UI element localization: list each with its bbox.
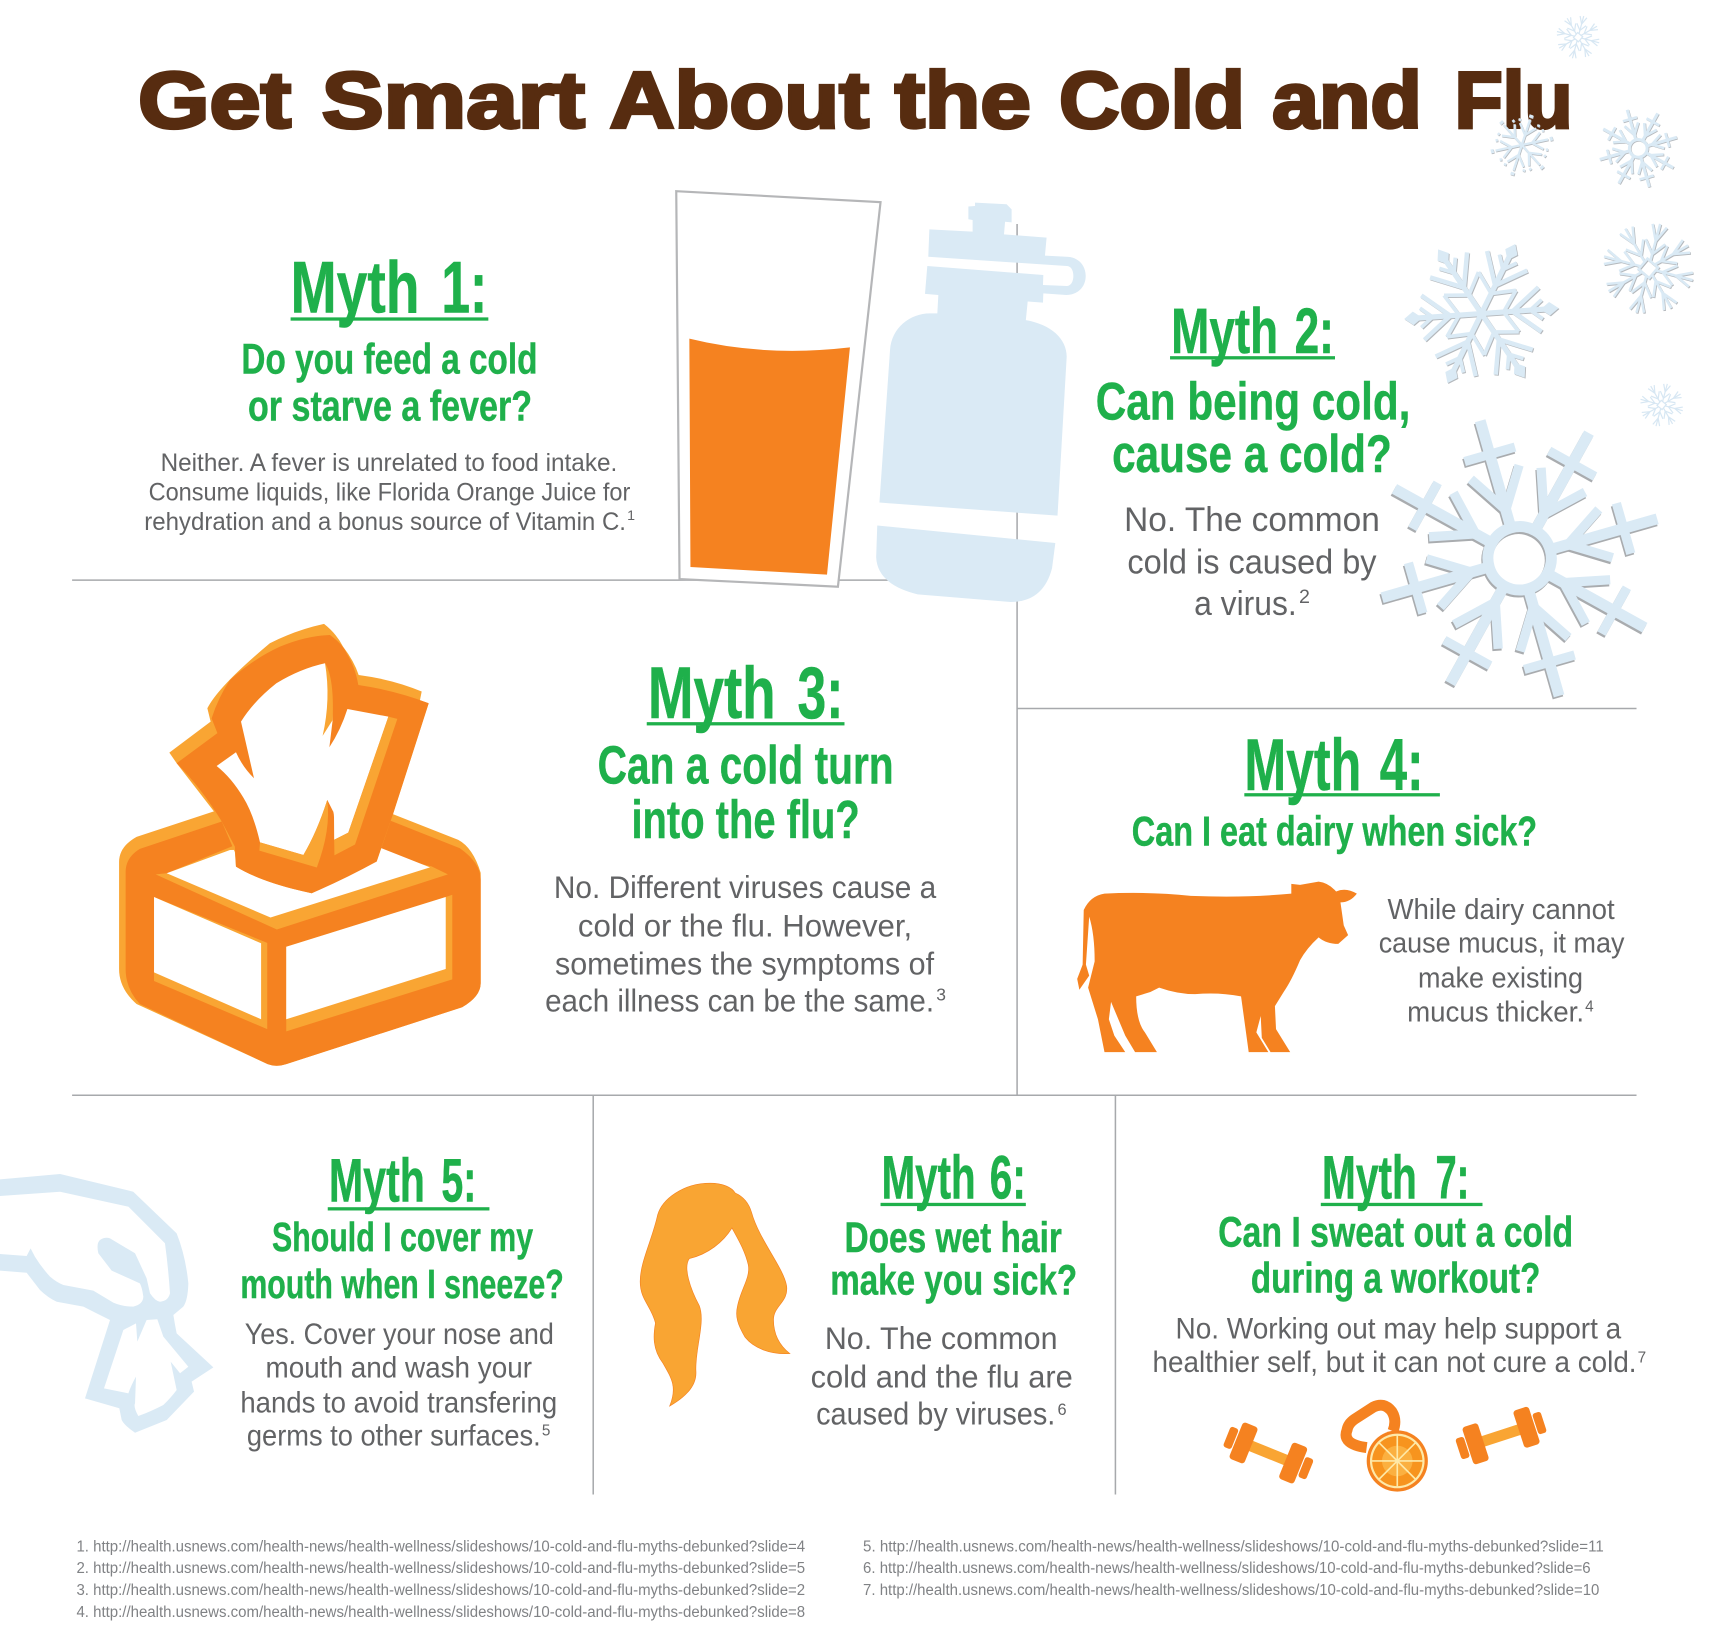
answer: myth 2: 2 — [1299, 586, 1310, 608]
answer: myth 7: healthier self, but it can not cure a cold. — [1153, 1346, 1637, 1379]
heading: myth 3: 3: — [798, 652, 843, 734]
answer: myth 5: mouth and wash your — [265, 1352, 532, 1385]
footnotes: right column — [863, 1538, 1604, 1599]
answer: myth 1: Consume liquids, like Florida Orange Juice for — [149, 479, 630, 506]
answer: myth 2: No. The common — [1124, 501, 1380, 539]
panel: myth 5 — [0, 1147, 564, 1452]
answer: myth 4 — [1379, 894, 1625, 1028]
footnotes: left column: 1. http://health.usnews.com/health-news/health-wellness/slideshows/10-cold-and-flu-myths-debunked?slide=4 — [76, 1538, 805, 1555]
answer: myth 1 — [144, 450, 635, 536]
title: the — [895, 55, 1031, 144]
panel: myth 6 — [640, 1143, 1077, 1432]
answer: myth 6: 6 — [1058, 1401, 1067, 1419]
answer: myth 6 — [811, 1320, 1073, 1432]
answer: myth 5 — [240, 1318, 557, 1452]
question: myth 3: Can a cold turn — [598, 736, 894, 795]
answer: myth 3 — [545, 869, 946, 1019]
title: Smart — [322, 55, 585, 144]
answer: myth 3: each illness can be the same. — [545, 983, 934, 1019]
answer: myth 3: No. Different viruses cause a — [554, 869, 937, 905]
icon: right dumbbell — [1452, 1403, 1550, 1468]
icon: large snowflake — [1341, 381, 1697, 737]
heading: myth 5: Myth — [329, 1147, 425, 1215]
question: myth 4: Can I eat dairy when sick? — [1132, 808, 1537, 855]
icon: tissue box — [119, 624, 481, 1066]
answer: myth 4: make existing — [1418, 963, 1583, 995]
answer: myth 2: cold is caused by — [1127, 544, 1377, 582]
answer: myth 6: cold and the flu are — [811, 1358, 1073, 1394]
answer: myth 7: No. Working out may help support a — [1176, 1312, 1622, 1345]
question: myth 6: Does wet hair — [844, 1214, 1062, 1262]
title: Flu — [1455, 55, 1573, 144]
question: myth 5: mouth when I sneeze? — [240, 1261, 564, 1307]
answer: myth 2 — [1124, 501, 1380, 623]
answer: myth 3: sometimes the symptoms of — [555, 946, 934, 982]
answer: myth 1: Neither. A fever is unrelated to food intake. — [161, 450, 617, 477]
heading: myth 3: Myth — [648, 652, 776, 734]
icon: hand sneezing into tissue — [0, 1174, 213, 1433]
panel: myth 3 — [119, 624, 946, 1066]
answer: myth 4: mucus thicker. — [1407, 996, 1584, 1028]
answer: myth 1: rehydration and a bonus source of Vitamin C. — [144, 509, 626, 536]
heading: myth 6: Myth — [882, 1143, 976, 1211]
title: and — [1272, 55, 1422, 144]
answer: myth 2: a virus. — [1194, 585, 1297, 623]
heading: myth 7: 7: — [1436, 1143, 1469, 1211]
question: myth 1 — [241, 336, 537, 431]
answer: myth 4: cause mucus, it may — [1379, 928, 1625, 960]
answer: myth 3: 3 — [936, 985, 946, 1005]
question: myth 2 — [1096, 374, 1410, 484]
title: About — [610, 55, 869, 144]
icon: orange slice kettlebell — [1346, 1405, 1428, 1492]
answer: myth 5: germs to other surfaces. — [247, 1419, 541, 1452]
footnotes: left column — [76, 1538, 805, 1621]
answer: myth 5: hands to avoid transfering — [240, 1387, 557, 1420]
heading: myth 5: 5: — [441, 1147, 476, 1215]
question: myth 5 — [240, 1214, 564, 1307]
heading: myth 1: Myth — [291, 246, 420, 328]
heading: myth 7: Myth — [1322, 1143, 1417, 1211]
question: myth 6 — [830, 1214, 1077, 1305]
heading: myth 1: 1: — [441, 246, 487, 328]
panel: myth 1 — [144, 191, 1086, 602]
question: myth 1: Do you feed a cold — [241, 336, 537, 384]
answer: myth 4: While dairy cannot — [1387, 894, 1615, 926]
question: myth 1: or starve a fever? — [248, 383, 532, 431]
footnotes: left column: 2. http://health.usnews.com/health-news/health-wellness/slideshows/10-cold-and-flu-myths-debunked?slide=5 — [76, 1560, 805, 1577]
answer: myth 3: cold or the flu. However, — [578, 907, 912, 943]
answer: myth 7 — [1153, 1312, 1646, 1379]
footnotes: right column: 5. http://health.usnews.com/health-news/health-wellness/slideshows/10-cold-and-flu-myths-debunked?slide=11 — [863, 1538, 1604, 1555]
question: myth 5: Should I cover my — [272, 1214, 534, 1260]
snowflakes: top right cluster — [1402, 10, 1705, 432]
icon: wet hair — [640, 1183, 790, 1406]
divider lines — [72, 224, 1637, 1495]
question: myth 7 — [1218, 1209, 1573, 1302]
question: myth 3 — [598, 736, 894, 850]
icon: glass of orange juice — [676, 191, 881, 587]
answer: myth 6: No. The common — [825, 1320, 1058, 1356]
question: myth 2: cause a cold? — [1112, 426, 1392, 484]
question: myth 3: into the flu? — [631, 791, 860, 850]
icon: left dumbbell — [1219, 1418, 1317, 1488]
title: Cold — [1059, 55, 1245, 144]
heading: myth 2: 2: — [1295, 295, 1334, 367]
answer: myth 4: 4 — [1585, 999, 1594, 1016]
panel: myth 7 — [1153, 1143, 1646, 1492]
icon: cow — [1077, 882, 1357, 1052]
icon: water bottle — [876, 203, 1086, 602]
footnotes: left column: 3. http://health.usnews.com/health-news/health-wellness/slideshows/10-cold-and-flu-myths-debunked?slide=2 — [76, 1582, 805, 1599]
question: myth 7: during a workout? — [1251, 1254, 1540, 1302]
question: myth 6: make you sick? — [830, 1257, 1077, 1305]
answer: myth 5: 5 — [542, 1423, 550, 1440]
heading: myth 4: 4: — [1380, 724, 1423, 806]
footnotes: right column: 6. http://health.usnews.com/health-news/health-wellness/slideshows/10-cold-and-flu-myths-debunked?slide=6 — [863, 1560, 1591, 1577]
answer: myth 6: caused by viruses. — [816, 1396, 1055, 1432]
answer: myth 5: Yes. Cover your nose and — [245, 1318, 554, 1351]
question: myth 7: Can I sweat out a cold — [1218, 1209, 1573, 1257]
panel: myth 4 — [1077, 724, 1625, 1052]
answer: myth 7: 7 — [1638, 1349, 1646, 1366]
panel: myth 2 — [1096, 295, 1697, 737]
footnotes: left column: 4. http://health.usnews.com/health-news/health-wellness/slideshows/10-cold-and-flu-myths-debunked?slide=8 — [76, 1604, 805, 1621]
heading: myth 2: Myth — [1171, 295, 1278, 367]
heading: myth 4: Myth — [1244, 724, 1361, 806]
question: myth 2: Can being cold, — [1096, 374, 1410, 432]
footnotes: right column: 7. http://health.usnews.com/health-news/health-wellness/slideshows/10-cold-and-flu-myths-debunked?slide=10 — [863, 1582, 1600, 1599]
answer: myth 1: 1 — [627, 508, 635, 524]
heading: myth 6: 6: — [990, 1143, 1026, 1211]
title: Get — [138, 55, 291, 144]
title — [138, 55, 1573, 144]
